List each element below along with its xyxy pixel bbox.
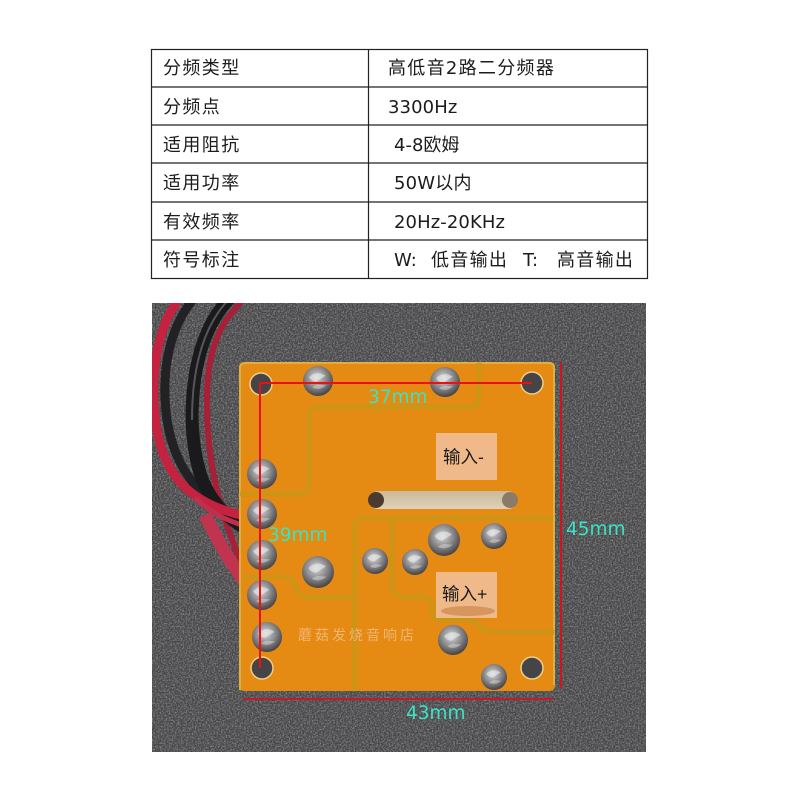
- row: effective frequency: 20Hz-20KHz: [394, 212, 505, 233]
- row: power: 适用功率: [163, 173, 241, 194]
- row: crossover point: [163, 97, 457, 118]
- pad: input minus: [436, 433, 497, 480]
- row: impedance: [163, 135, 459, 156]
- row: symbol notes: T:: [522, 250, 538, 271]
- row: symbol notes: 高音输出: [557, 250, 634, 271]
- row: crossover type: [163, 58, 555, 79]
- row: impedance: 适用阻抗: [163, 135, 241, 156]
- circuit board: [239, 362, 555, 691]
- row: effective frequency: [163, 212, 505, 233]
- row: crossover point: 分频点: [163, 97, 221, 118]
- row: power: 50W以内: [394, 173, 472, 194]
- row: crossover type: 分频类型: [163, 58, 241, 79]
- pad: input plus: [436, 572, 497, 618]
- pad: input plus: 输入+: [442, 584, 487, 604]
- row: power: [163, 173, 472, 194]
- pad: input minus: 输入-: [443, 447, 484, 467]
- dimension lines: [243, 362, 561, 699]
- row: effective frequency: 有效频率: [163, 212, 241, 233]
- row: crossover type: 高低音2路二分频器: [388, 58, 555, 79]
- row: impedance: 4-8欧姆: [394, 135, 459, 156]
- row: symbol notes: 符号标注: [163, 250, 241, 271]
- product photo: [152, 296, 646, 752]
- dimension label: 45mm: 45mm: [566, 519, 626, 540]
- row: symbol notes: W:: [394, 250, 417, 271]
- row: symbol notes: [163, 250, 634, 271]
- dimension label: 37mm: 37mm: [368, 387, 428, 408]
- mounting holes: [250, 372, 543, 679]
- speaker wires: [154, 296, 248, 582]
- solder joints: [247, 366, 507, 690]
- board slot: [368, 491, 518, 509]
- specification table: [151, 50, 648, 278]
- shop watermark: 蘑菇发烧音响店: [298, 627, 417, 643]
- dimension label: 39mm: 39mm: [268, 525, 328, 546]
- dimension label: 43mm: 43mm: [406, 703, 466, 724]
- row: symbol notes: 低音输出: [431, 250, 508, 271]
- row: crossover point: 3300Hz: [388, 97, 457, 118]
